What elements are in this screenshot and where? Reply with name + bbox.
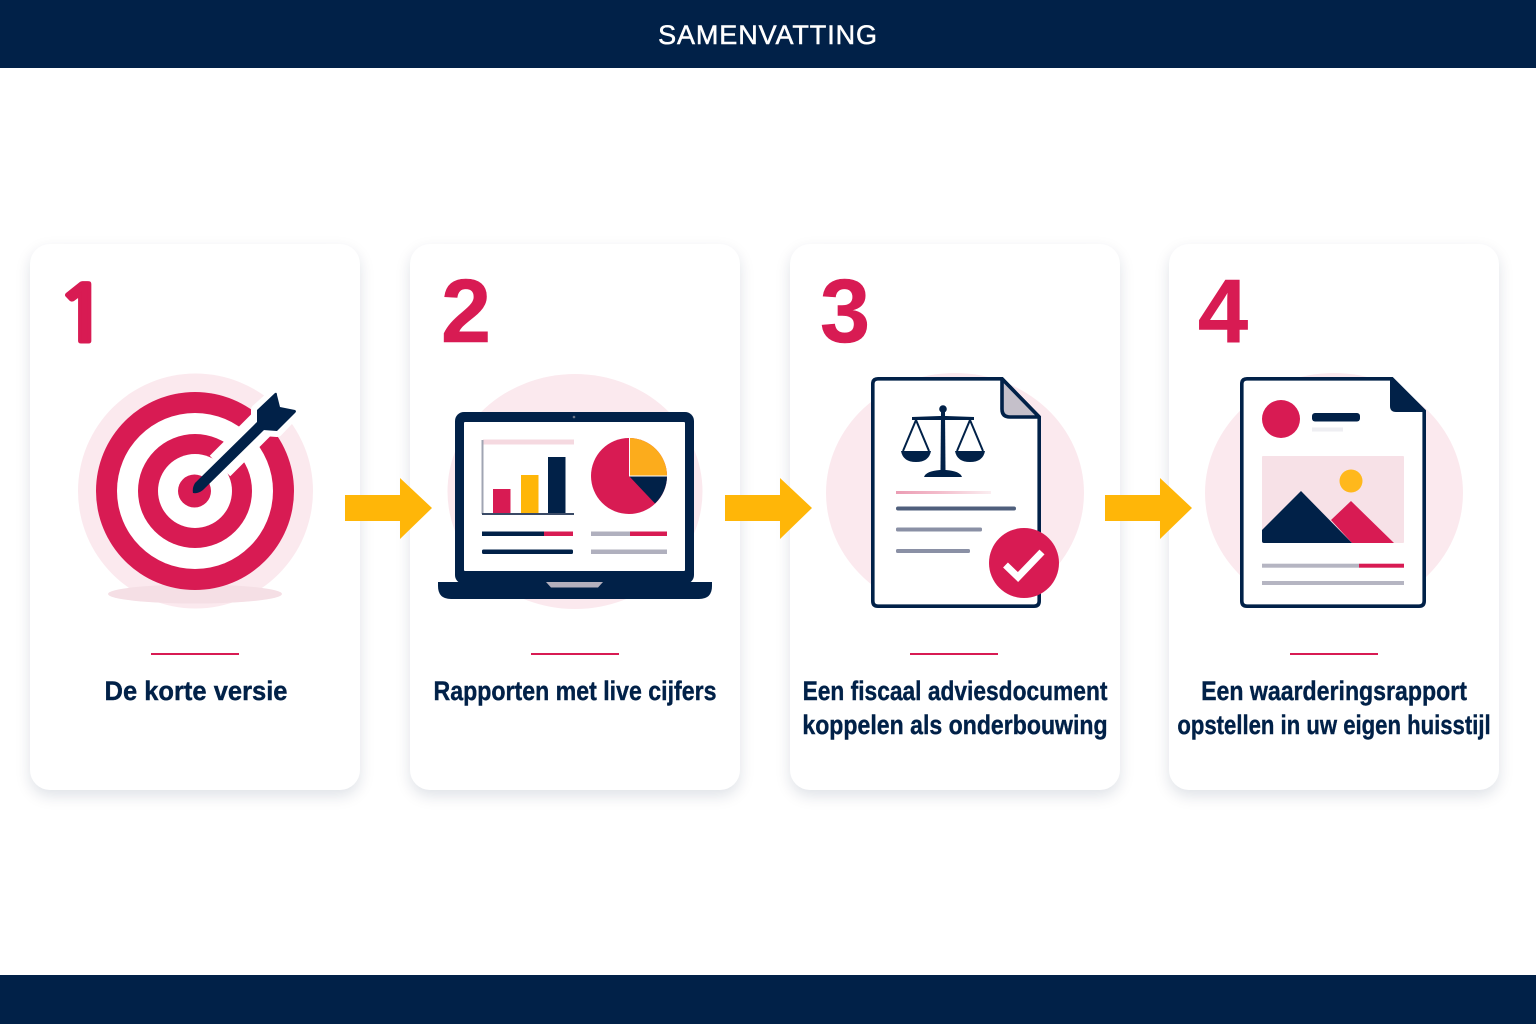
number 4: 4 (1198, 262, 1248, 362)
header bar (0, 0, 1536, 68)
panel: card 1 (30, 244, 360, 790)
icon: target with arrow (78, 374, 313, 608)
caption 3 (802, 676, 1108, 740)
rule 4 (1290, 653, 1378, 655)
rule 1 (151, 653, 239, 655)
footer bar (0, 975, 1536, 1024)
caption 4: Een waarderingsrapport (1201, 676, 1466, 706)
number 1: 1 (55, 276, 110, 354)
rule 2 (531, 653, 619, 655)
caption 1: De korte versie (104, 676, 287, 706)
caption 4: opstellen in uw eigen huisstijl (1177, 710, 1490, 740)
icon: laptop with dashboard (438, 374, 712, 609)
illustrations and arrows (78, 373, 1463, 609)
icon: report document with image (1205, 373, 1463, 613)
panel: card 2 (410, 244, 740, 790)
number 2: 2 (441, 262, 491, 362)
icon: legal document with check (826, 373, 1084, 613)
rule 3 (910, 653, 998, 655)
number 3: 3 (820, 262, 870, 362)
caption 3: koppelen als onderbouwing (802, 710, 1107, 740)
panel: card 3 (790, 244, 1120, 790)
arrow 1 (345, 478, 432, 539)
title: SAMENVATTING (658, 20, 878, 50)
caption 3: Een fiscaal adviesdocument (802, 676, 1107, 706)
caption 2: Rapporten met live cijfers (433, 676, 716, 706)
panel: card 4 (1169, 244, 1499, 790)
caption 4 (1177, 676, 1490, 740)
arrow 3 (1105, 478, 1192, 539)
arrow 2 (725, 478, 812, 539)
